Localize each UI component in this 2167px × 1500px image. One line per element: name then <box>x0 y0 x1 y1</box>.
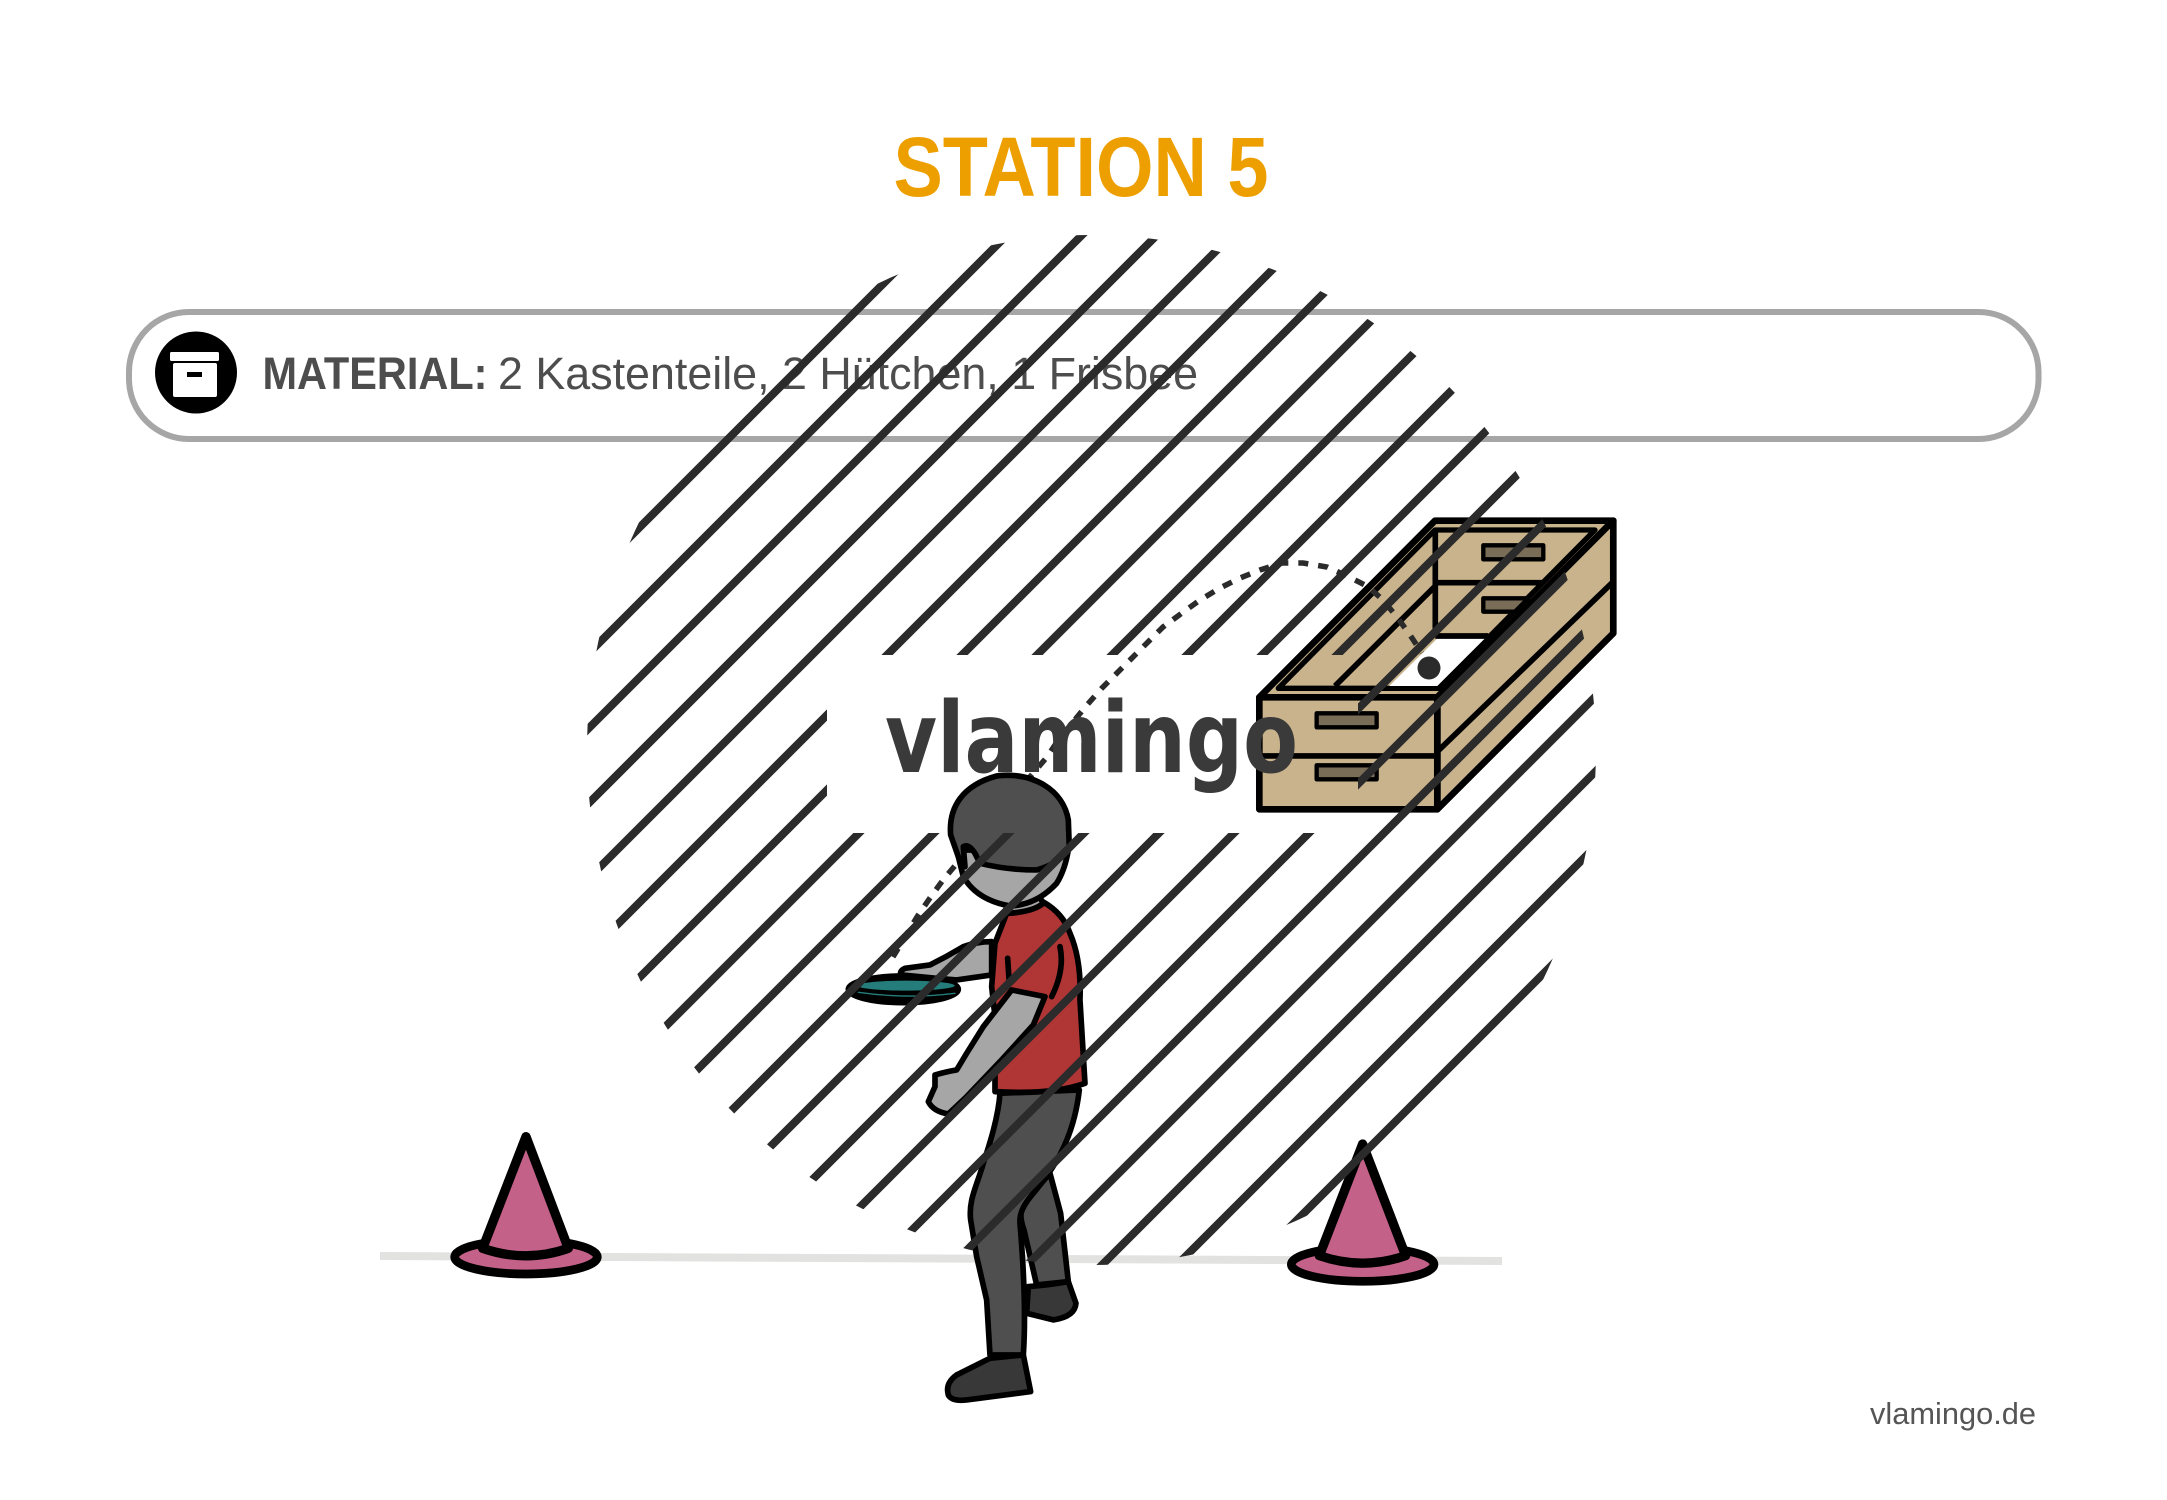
logo wordmark: vlamingo <box>885 682 1298 796</box>
icon: left cone <box>455 1137 597 1274</box>
face <box>957 850 1068 906</box>
far leg <box>1021 1173 1068 1285</box>
near leg <box>970 1090 1079 1355</box>
frisbee target ball <box>1418 656 1440 680</box>
title: STATION 5 <box>894 120 1268 214</box>
icon: wooden box <box>1259 521 1613 809</box>
footer url: vlamingo.de <box>1870 1396 2036 1431</box>
shirt <box>992 902 1085 1092</box>
far shoe <box>1027 1282 1076 1320</box>
sleeve lines <box>1008 947 1061 997</box>
icon: archive box <box>155 332 237 414</box>
near shoe <box>948 1355 1031 1400</box>
hair <box>950 775 1069 870</box>
figure: person throwing frisbee <box>848 775 1085 1400</box>
near arm <box>928 990 1045 1114</box>
throw trajectory <box>893 563 1422 957</box>
hatch watermark <box>587 235 1596 1265</box>
neck <box>1005 895 1043 913</box>
material list: 2 Kastenteile, 2 Hütchen, 1 Frisbee <box>498 348 1198 399</box>
icon: right cone <box>1291 1144 1434 1281</box>
material label: MATERIAL: <box>262 348 488 399</box>
frisbee <box>848 976 958 1003</box>
panel: material bar <box>129 312 2038 439</box>
far arm <box>901 942 992 980</box>
ground line <box>380 1256 1502 1261</box>
